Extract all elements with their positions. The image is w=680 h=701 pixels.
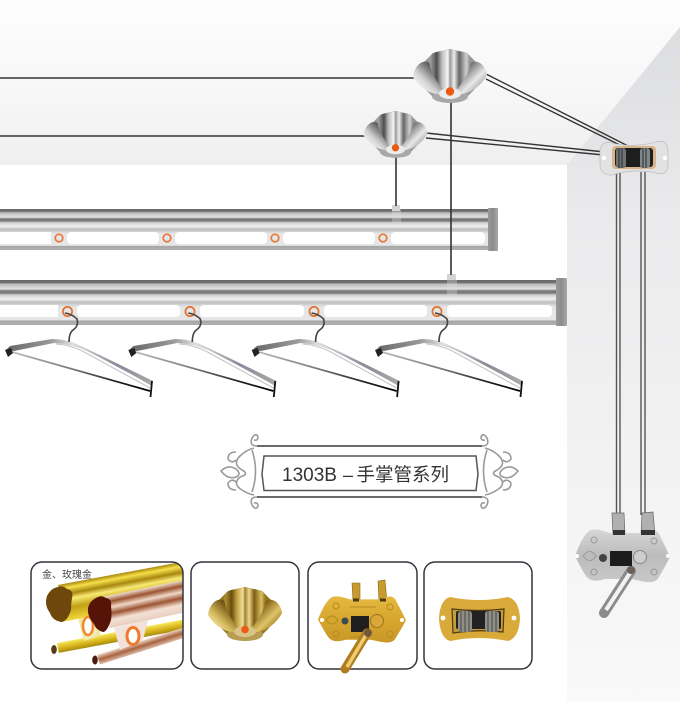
panel: gold flower [191,562,299,669]
title text: 手掌管系列 [356,464,449,485]
panel: gold pulley bracket [424,562,532,669]
background wall [567,27,680,701]
icon: wall pulley bracket [600,141,668,175]
ornament: left swirl [221,435,258,508]
hanger 3 [252,313,400,397]
title text: – [343,465,353,485]
icon: lower silver pulley flower [364,111,428,158]
label: gold and rose gold: 金、玫瑰金 [42,568,92,581]
frame: outer [257,446,482,497]
title frame with ornaments [221,435,518,508]
icon: gold crank plate [318,580,406,669]
title text: 1303B [282,465,337,486]
frame: inner [262,456,478,490]
lower drying rail [0,274,567,326]
panel background [31,562,183,669]
hanger 1 [5,313,153,397]
cables [0,74,645,515]
panel: gold hand crank [308,562,417,669]
panel border [31,562,183,669]
icon: upper silver pulley flower [413,49,487,103]
icon: gold bracket [439,597,520,641]
background ceiling [0,0,680,165]
hanger 2 [128,313,276,397]
panel: tube colours [30,561,184,670]
upper drying rail [0,205,498,251]
icon: gold pulley flower [208,587,282,641]
hanger 4 [375,313,523,397]
ornament: right swirl [481,435,518,508]
tubes [46,563,182,664]
icon: silver crank plate [575,512,670,613]
